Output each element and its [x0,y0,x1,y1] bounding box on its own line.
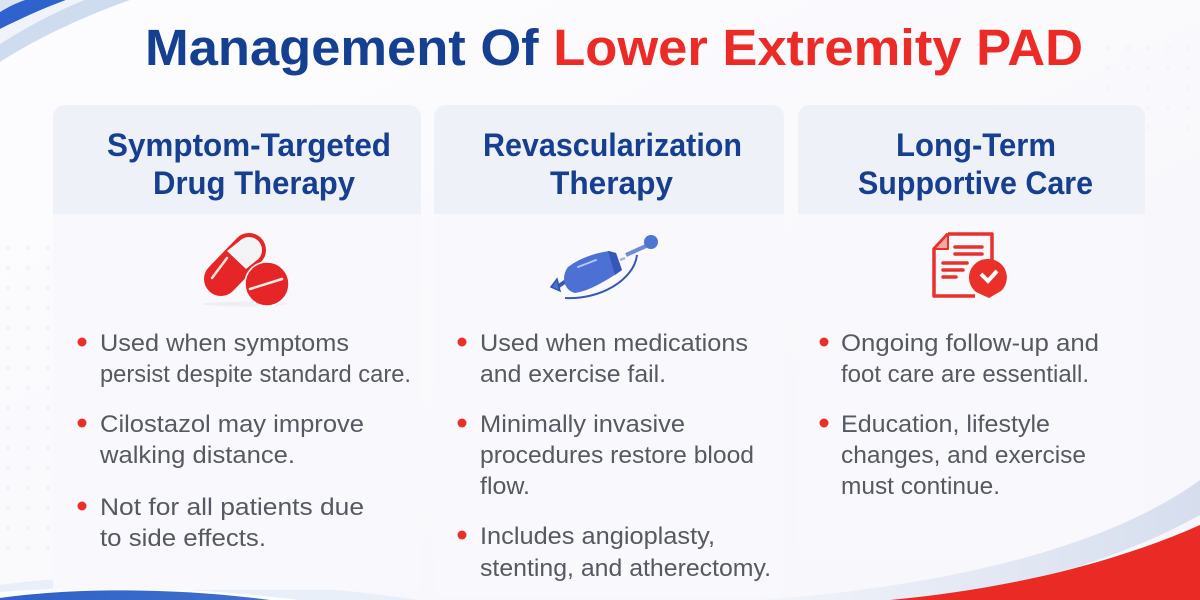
card 1 heading: Drug Therapy [153,165,355,201]
card 1 background [53,105,421,590]
card 3 bullet list: Education, lifestyle [841,411,1050,438]
card 1 bullet list: Used when symptoms [100,330,349,357]
card 2 heading: Revascularization [483,127,742,163]
card 2 bullet list [458,330,771,582]
card 3 bullet list: changes, and exercise [841,442,1086,469]
card 3 header band [798,105,1145,214]
icon: angioplasty balloon catheter [551,235,658,298]
card 2 heading [483,127,742,201]
card 2 header band [434,105,784,214]
card 1 bullet list: walking distance. [99,442,295,469]
card 3 bullet list [820,330,1099,500]
icon: pill capsule and tablet [203,237,289,306]
card 1 bullet list: Not for all patients due [100,494,364,521]
card 1 header band [53,105,421,214]
card 3 bullet list: must continue. [841,473,1000,500]
card 1 heading [107,127,391,201]
card 3 heading: Supportive Care [858,165,1093,201]
card 1 bullet list [78,330,411,552]
card 2 bullet list: Includes angioplasty, [480,523,715,550]
card 1 bullet list: persist despite standard care. [100,361,411,388]
icon: document with check badge [934,234,1007,298]
panel: long-term supportive care [798,105,1145,560]
card 2 bullet list: stenting, and atherectomy. [480,555,771,582]
card 3 heading [858,127,1093,201]
card 1 bullet list: Cilostazol may improve [100,411,364,438]
top-left swoosh [0,0,130,62]
card 2 bullet list: procedures restore blood [480,442,754,469]
card 3 background [798,105,1145,560]
card 2 heading: Therapy [550,165,673,201]
card 2 bullet list: Used when medications [480,330,748,357]
card 3 bullet list: Ongoing follow-up and [841,330,1099,357]
bottom-right swoosh [760,480,1200,600]
bottom-left swoosh [0,577,420,600]
card 2 bullet list: flow. [480,473,530,500]
card 2 bullet list: and exercise fail. [480,361,666,388]
card 2 background [434,105,784,597]
panel: revascularization therapy [434,105,784,597]
card 3 bullet list: foot care are essentiall. [841,361,1089,388]
panel: symptom-targeted drug therapy [53,105,421,590]
title: Management Of Lower Extremity PAD [145,19,1083,76]
card 3 heading: Long-Term [896,127,1056,163]
card 1 heading: Symptom-Targeted [107,127,391,163]
card 1 bullet list: to side effects. [100,525,266,552]
card 2 bullet list: Minimally invasive [480,411,685,438]
